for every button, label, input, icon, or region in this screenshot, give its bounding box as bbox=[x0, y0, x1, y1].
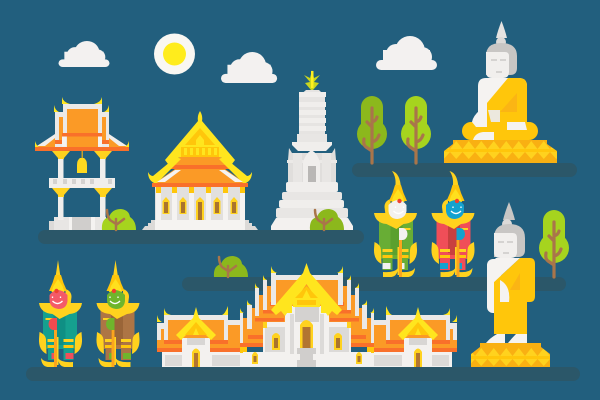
giant: white face, green body bbox=[374, 185, 417, 277]
Buddha legs and body bbox=[462, 78, 538, 140]
ground strip: bottom bbox=[26, 367, 580, 381]
tree: light green bbox=[401, 96, 431, 163]
giant hat spire 1 bbox=[56, 260, 60, 277]
central gable bbox=[271, 263, 342, 316]
stupa body bbox=[287, 148, 337, 185]
seated Buddha bbox=[444, 21, 557, 163]
cloud: right bbox=[376, 36, 437, 70]
standing Buddha bbox=[471, 202, 550, 367]
tower capitals bbox=[52, 151, 112, 197]
stupa gallery bbox=[292, 142, 332, 151]
temple: small hall bbox=[142, 111, 258, 230]
giant: blue face, red body bbox=[431, 185, 475, 277]
giant curved hat 1 bbox=[392, 171, 401, 188]
stupa finial bbox=[304, 70, 320, 90]
central hall roof bbox=[271, 275, 343, 306]
hall walls bbox=[155, 187, 245, 230]
lotus pedestal bbox=[471, 343, 550, 367]
giant: green face, brown body bbox=[96, 275, 140, 367]
stupa bbox=[271, 70, 353, 230]
tree: right bbox=[539, 210, 569, 277]
hall windows bbox=[162, 197, 238, 220]
central hall facade bbox=[288, 306, 326, 367]
giant: red face, teal body bbox=[39, 275, 82, 367]
ground strip: upper left bbox=[38, 230, 364, 244]
Buddha head bbox=[486, 21, 517, 78]
bell bbox=[77, 151, 87, 173]
giant curved hat 2 bbox=[450, 171, 458, 188]
Buddha feet bbox=[486, 334, 527, 343]
right wing bbox=[307, 266, 457, 367]
lotus pedestal bbox=[444, 140, 557, 163]
tower stone base bbox=[49, 217, 107, 230]
bush by bell tower bbox=[102, 209, 136, 230]
sun bbox=[154, 34, 195, 74]
stupa base tiers bbox=[271, 182, 353, 230]
cloud: left bbox=[58, 41, 109, 67]
bell tower bbox=[35, 97, 129, 230]
giant hat spire 2 bbox=[113, 260, 118, 277]
tower columns bbox=[58, 155, 106, 220]
cloud: centre bbox=[221, 52, 277, 83]
grand temple bbox=[157, 263, 457, 367]
hall roof bbox=[148, 111, 252, 187]
ground strip: upper right bbox=[352, 163, 577, 177]
tower roof bbox=[35, 97, 129, 151]
bush by stupa bbox=[310, 209, 344, 230]
ground strip: middle bbox=[182, 277, 566, 291]
left wing bbox=[157, 266, 307, 367]
stupa upper tiers bbox=[297, 90, 327, 142]
bush on middle strip bbox=[214, 256, 248, 277]
hall steps bbox=[142, 220, 258, 230]
tree: dark green bbox=[357, 96, 387, 163]
Buddha body and robe bbox=[487, 258, 535, 334]
Buddha head bbox=[494, 202, 525, 258]
tower balustrade bbox=[49, 178, 115, 188]
